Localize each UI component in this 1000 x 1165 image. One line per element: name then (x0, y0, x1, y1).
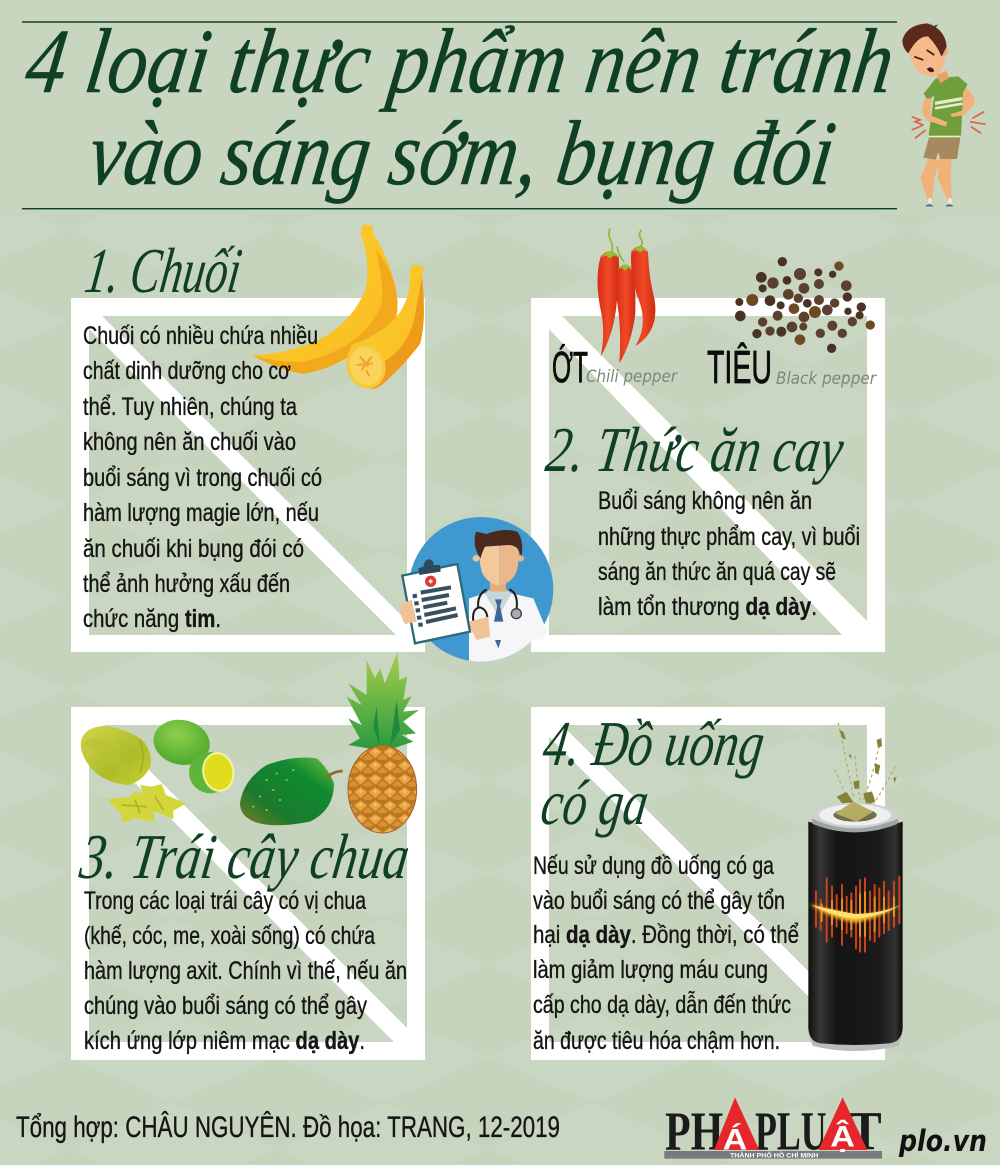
icon: chili peppers (597, 228, 655, 363)
label: chili pepper: ỚT (552, 343, 588, 392)
logo: Pháp Luật: THÀNH PHỐ HỒ CHÍ MINH (730, 1150, 819, 1160)
text block 4: ăn được tiêu hóa chậm hơn. (533, 1027, 780, 1055)
text block 4 (533, 852, 799, 1055)
text block 4: Nếu sử dụng đồ uống có ga (533, 852, 774, 880)
logo: Pháp Luật: Á (723, 1122, 747, 1156)
source credit: Tổng hợp: CHÂU NGUYÊN. Đồ họa: TRANG, 12-2019 (16, 1111, 560, 1144)
text block 1 (83, 322, 322, 633)
text block 3: kích ứng lớp niêm mạc dạ dày. (84, 1027, 365, 1055)
icon: doctor (400, 517, 553, 663)
text block 1: thể ảnh hưởng xấu đến (83, 570, 290, 598)
text block 3: chúng vào buổi sáng có thể gây (84, 992, 367, 1020)
text block 4: vào buổi sáng có thể gây tổn (533, 887, 785, 915)
heading 4: 4. Đồ uống (539, 708, 769, 779)
text block 4: làm giảm lượng máu cung (533, 956, 768, 984)
logo: Pháp Luật: PH (665, 1100, 723, 1161)
text block 1: ăn chuối khi bụng đói có (83, 535, 304, 563)
text block 2: những thực phẩm cay, vì buổi (598, 523, 860, 551)
label: chili pepper (552, 343, 678, 392)
panel 2 frame (531, 298, 885, 652)
panel 3 frame (71, 707, 425, 1060)
label: chili pepper: Chili pepper (586, 367, 678, 387)
logo: Pháp Luật: T (848, 1100, 882, 1161)
icon: pineapple (347, 652, 419, 833)
text block 3: hàm lượng axit. Chính vì thế, nếu ăn (84, 957, 407, 985)
heading 1: 1. Chuối (81, 235, 246, 306)
text block 2 (598, 487, 860, 621)
website: plo.vn (898, 1124, 987, 1158)
text block 1: không nên ăn chuối vào (83, 428, 296, 456)
text block 1: buổi sáng vì trong chuối có (83, 464, 322, 492)
icon: star fruit (81, 726, 186, 823)
panel 4 frame (531, 707, 885, 1060)
text block 3: (khế, cóc, me, xoài sống) có chứa (84, 922, 375, 950)
heading 4 (537, 708, 769, 838)
heading 4: có ga (537, 767, 653, 838)
heading 2: 2. Thức ăn cay (542, 414, 848, 485)
text block 1: chất dinh dưỡng cho cơ (83, 357, 291, 385)
text block 1: thể. Tuy nhiên, chúng ta (83, 393, 297, 421)
logo: Pháp Luật (664, 1097, 882, 1161)
heading 3: 3. Trái cây chua (75, 821, 414, 892)
logo: Pháp Luật: PLU (755, 1100, 827, 1161)
text block 2: sáng ăn thức ăn quá cay sẽ (598, 558, 836, 586)
label: black pepper: Black pepper (776, 369, 877, 389)
title (20, 10, 900, 209)
icon: man with stomach ache (902, 22, 986, 206)
icon: bananas (252, 225, 424, 394)
icon: energy drink can (808, 723, 903, 1051)
title: vào sáng sớm, bụng đói (83, 102, 841, 204)
text block 4: cấp cho dạ dày, dẫn đến thức (533, 990, 791, 1019)
icon: black peppercorns (735, 257, 875, 353)
text block 3 (84, 887, 407, 1055)
text block 1: Chuối có nhiều chứa nhiều (83, 322, 318, 350)
text block 3: Trong các loại trái cây có vị chua (84, 887, 366, 915)
icon: limes (149, 715, 238, 794)
panel 1 frame (71, 298, 425, 652)
text block 1: chức năng tim. (83, 605, 221, 633)
text block 2: làm tổn thương dạ dày. (598, 593, 817, 621)
label: black pepper (707, 341, 877, 393)
label: black pepper: TIÊU (707, 341, 772, 393)
icon: green mango (240, 757, 343, 825)
text block 1: hàm lượng magie lớn, nếu (83, 499, 319, 527)
text block 4: hại dạ dày. Đồng thời, có thể (533, 921, 799, 949)
text block 2: Buổi sáng không nên ăn (598, 487, 812, 515)
logo: Pháp Luật: Ậ (830, 1120, 855, 1154)
